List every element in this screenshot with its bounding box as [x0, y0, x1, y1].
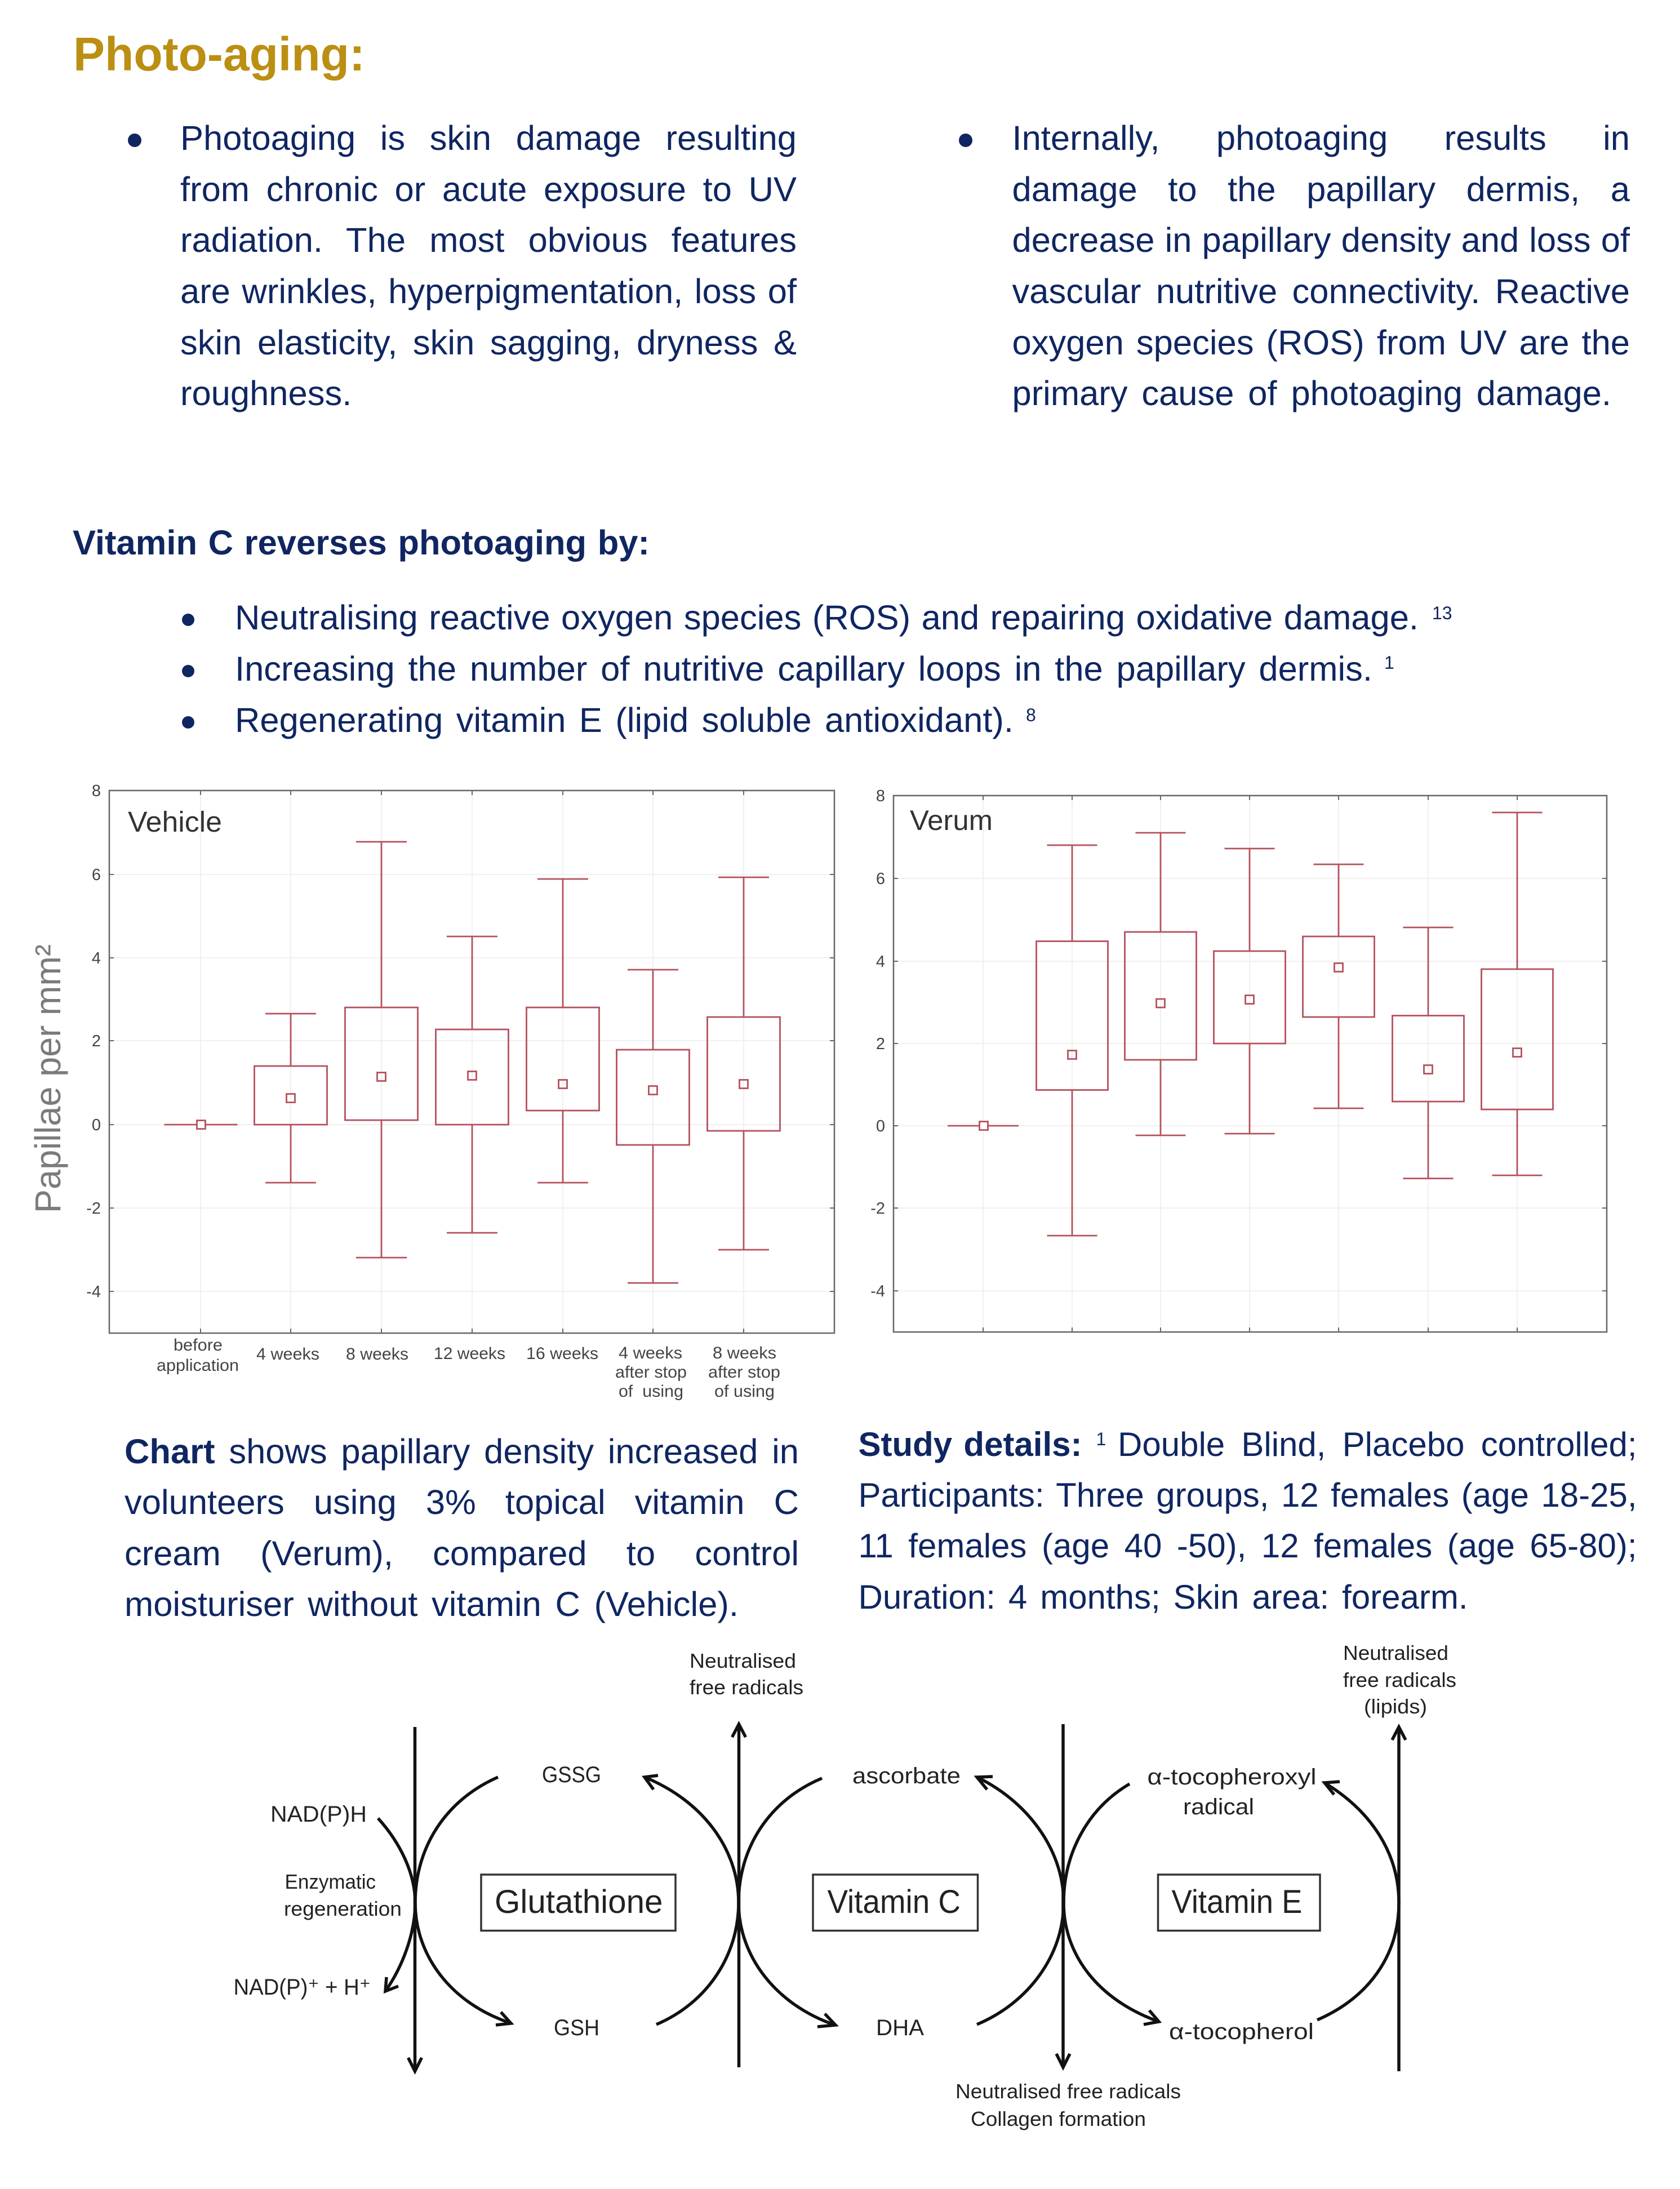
list: vitamin C mechanisms: Increasing the number of nutritive capillary loops in the papillary dermis.: [235, 650, 1372, 689]
x axis labels: 8 weeks: [713, 1344, 776, 1362]
bullet: [182, 716, 194, 729]
box: glutathione: Glutathione: [495, 1884, 663, 1920]
box: 4 weeks: [1037, 845, 1108, 1236]
y axis tick labels: 8: [92, 782, 101, 800]
arrow: vitamin C right arc: [977, 1777, 1064, 2024]
y axis tick labels: 2: [92, 1032, 101, 1050]
label: neutralised free radicals (lipids): [1343, 1641, 1456, 1718]
box: 4 weeks: [255, 1014, 327, 1183]
label: ascorbate: ascorbate: [852, 1764, 961, 1788]
text block: photoaging definition: roughness.: [180, 374, 352, 413]
box: 8 weeks: [1125, 833, 1197, 1135]
text block: chart caption: moisturiser without vitamin C (Vehicle).: [125, 1585, 739, 1624]
text block: photoaging definition: are wrinkles, hyperpigmentation, loss of: [180, 272, 797, 311]
arrow: glutathione axis down: [408, 1727, 421, 2071]
text block: photoaging definition: from chronic or acute exposure to UV: [180, 170, 797, 208]
label: alpha-tocopheroxyl radical: radical: [1183, 1795, 1254, 1819]
arrow: neutralised free radicals up: [732, 1724, 746, 2067]
text block: study details: Participants: Three groups, 12 females (age 18-25,: [859, 1476, 1637, 1514]
box: 12 weeks: [436, 936, 508, 1233]
box: vitamin E: Vitamin E: [1172, 1884, 1303, 1920]
text block: internal damage: [959, 119, 1630, 413]
arrow: glutathione left arc: [415, 1777, 511, 2025]
arrow: vitamin E left arc: [1064, 1784, 1159, 2024]
list: vitamin C mechanisms: Regenerating vitamin E (lipid soluble antioxidant).: [235, 701, 1014, 740]
list: vitamin C mechanisms: 1: [1384, 652, 1394, 673]
label: alpha-tocopheroxyl radical: [1147, 1765, 1316, 1819]
label: alpha-tocopherol: α-tocopherol: [1169, 2019, 1314, 2044]
y axis tick labels: -4: [870, 1282, 885, 1300]
label: enzymatic regeneration: regeneration: [284, 1897, 402, 1920]
box: 4 weeks after stop: [616, 970, 690, 1283]
x axis labels: 8 weeks: [346, 1345, 408, 1364]
box plots: [165, 842, 780, 1283]
y axis tick labels: 0: [92, 1116, 101, 1134]
box: vitamin E: [1158, 1875, 1320, 1930]
text block: photoaging definition: [128, 119, 797, 413]
label: GSH: GSH: [554, 2015, 599, 2040]
chart frame: [109, 791, 834, 1333]
text block: internal damage: primary cause of photoaging damage.: [1012, 374, 1611, 413]
arrow: vitamin C axis down: [1056, 1724, 1070, 2067]
y axis tick labels: 8: [876, 787, 885, 805]
label: alpha-tocopheroxyl radical: α-tocopheroxyl: [1147, 1765, 1316, 1790]
x axis labels: 4 weeks: [256, 1345, 319, 1364]
label: neutralised free radicals: Neutralised: [690, 1649, 796, 1672]
label: neutralised free radicals, collagen formation: Collagen formation: [971, 2107, 1146, 2130]
label: neutralised free radicals, collagen formation: [955, 2080, 1181, 2130]
list: vitamin C mechanisms: 8: [1026, 705, 1036, 725]
x axis labels: before: [174, 1336, 223, 1355]
y axis tick labels: [870, 787, 885, 1300]
chart label: vehicle: Vehicle: [128, 806, 222, 838]
label: neutralised free radicals, collagen formation: Neutralised free radicals: [955, 2080, 1181, 2103]
box: before application: [165, 1120, 238, 1129]
list: vitamin C mechanisms: 13: [1432, 603, 1452, 623]
bullet: [182, 614, 194, 626]
box: 8 weeks: [345, 842, 418, 1258]
y axis tick labels: 4: [876, 953, 885, 971]
chart: vehicle box plot: [28, 782, 834, 1401]
label: neutralised free radicals (lipids): free radicals: [1343, 1668, 1456, 1691]
x axis labels: application: [157, 1356, 239, 1375]
text block: study details: 1: [1096, 1429, 1106, 1449]
y axis tick labels: 4: [92, 949, 101, 967]
text block: internal damage: Internally, photoaging results in: [1012, 119, 1630, 158]
x axis labels: after stop: [708, 1363, 780, 1382]
label: enzymatic regeneration: Enzymatic: [285, 1870, 376, 1893]
box: 8 weeks after stop: [1482, 812, 1553, 1175]
text block: photoaging definition: Photoaging is skin damage resulting: [180, 119, 797, 158]
bullet: [128, 134, 141, 147]
diagram: antioxidant regeneration cycle: [233, 1641, 1456, 2130]
label: NAD(P)+ + H+: NAD(P)⁺ + H⁺: [233, 1975, 371, 2000]
label: GSSG: GSSG: [542, 1762, 601, 1787]
bullet: [959, 134, 972, 147]
text block: study details: [859, 1426, 1637, 1616]
chart: verum box plot: [870, 787, 1607, 1332]
x axis labels: of using: [619, 1382, 683, 1401]
y axis tick labels: 2: [876, 1035, 885, 1053]
box: 8 weeks after stop: [708, 877, 780, 1250]
text block: study details: Double Blind, Placebo controlled;: [1118, 1426, 1637, 1463]
y axis tick labels: 6: [876, 870, 885, 888]
box plots: [948, 812, 1553, 1236]
box: glutathione: [481, 1875, 675, 1930]
box: before application: [948, 1121, 1019, 1130]
text block: study details: 11 females (age 40 -50), 12 females (age 65-80);: [859, 1527, 1637, 1565]
chart frame: [894, 796, 1607, 1332]
y axis tick labels: -2: [86, 1200, 101, 1218]
arrow: glutathione right arc: [645, 1775, 739, 2024]
label: DHA: DHA: [876, 2015, 924, 2040]
y axis tick labels: 6: [92, 866, 101, 884]
text block: chart caption: cream (Verum), compared to control: [125, 1534, 799, 1573]
list: vitamin C mechanisms: Neutralising reactive oxygen species (ROS) and repairing oxidative damage.: [235, 598, 1419, 637]
list: vitamin C mechanisms: [182, 598, 1452, 740]
box: vitamin C: [813, 1875, 978, 1930]
label: neutralised free radicals (lipids): (lipids): [1364, 1695, 1427, 1718]
x axis labels: 4 weeks: [619, 1344, 682, 1362]
label: neutralised free radicals: free radicals: [690, 1676, 803, 1699]
text block: internal damage: damage to the papillary dermis, a: [1012, 170, 1630, 208]
text block: internal damage: oxygen species (ROS) from UV are the: [1012, 323, 1630, 362]
y axis title: Papillae per mm²: [28, 944, 68, 1213]
arrow: vitamin C left arc: [739, 1778, 835, 2027]
arrow: NAD(P)H arc: [378, 1818, 415, 1991]
label: study details: Study details:: [859, 1426, 1082, 1463]
x axis labels: 12 weeks: [434, 1344, 505, 1363]
text block: internal damage: vascular nutritive connectivity. Reactive: [1012, 272, 1630, 311]
x axis labels: of using: [714, 1382, 775, 1401]
arrow: lipids up: [1392, 1727, 1406, 2071]
label: neutralised free radicals (lipids): Neutralised: [1343, 1641, 1448, 1664]
box: vitamin C: Vitamin C: [827, 1884, 961, 1920]
text block: internal damage: decrease in papillary density and loss of: [1012, 221, 1630, 260]
y axis tick labels: -4: [86, 1283, 101, 1301]
x axis labels: [157, 1336, 780, 1401]
x axis labels: 16 weeks: [526, 1344, 598, 1363]
x axis labels: after stop: [615, 1363, 687, 1382]
label: neutralised free radicals: [690, 1649, 803, 1699]
y axis tick labels: [86, 782, 101, 1301]
text block: study details: Duration: 4 months; Skin area: forearm.: [859, 1578, 1468, 1616]
text block: chart caption: [125, 1432, 799, 1624]
label: enzymatic regeneration: [284, 1870, 402, 1920]
heading: vitamin C reverses photoaging: Vitamin C reverses photoaging by:: [73, 523, 650, 562]
title: Photo-aging:: [73, 28, 365, 81]
label: NAD(P)H: NAD(P)H: [270, 1802, 367, 1827]
text block: photoaging definition: skin elasticity, skin sagging, dryness &: [180, 323, 797, 362]
text block: chart caption: volunteers using 3% topical vitamin C: [125, 1483, 799, 1522]
box: 12 weeks: [1214, 849, 1286, 1134]
text block: chart caption: Chart shows papillary density increased in: [125, 1432, 799, 1471]
box: 16 weeks: [1303, 864, 1375, 1108]
y axis tick labels: 0: [876, 1117, 885, 1135]
bullet: [182, 665, 194, 677]
box: 4 weeks after stop: [1393, 927, 1464, 1179]
arrow: vitamin E right arc: [1317, 1782, 1399, 2020]
box: 16 weeks: [526, 879, 599, 1183]
chart label: verum: Verum: [910, 805, 993, 836]
y axis tick labels: -2: [870, 1200, 885, 1218]
text block: photoaging definition: radiation. The most obvious features: [180, 221, 797, 260]
